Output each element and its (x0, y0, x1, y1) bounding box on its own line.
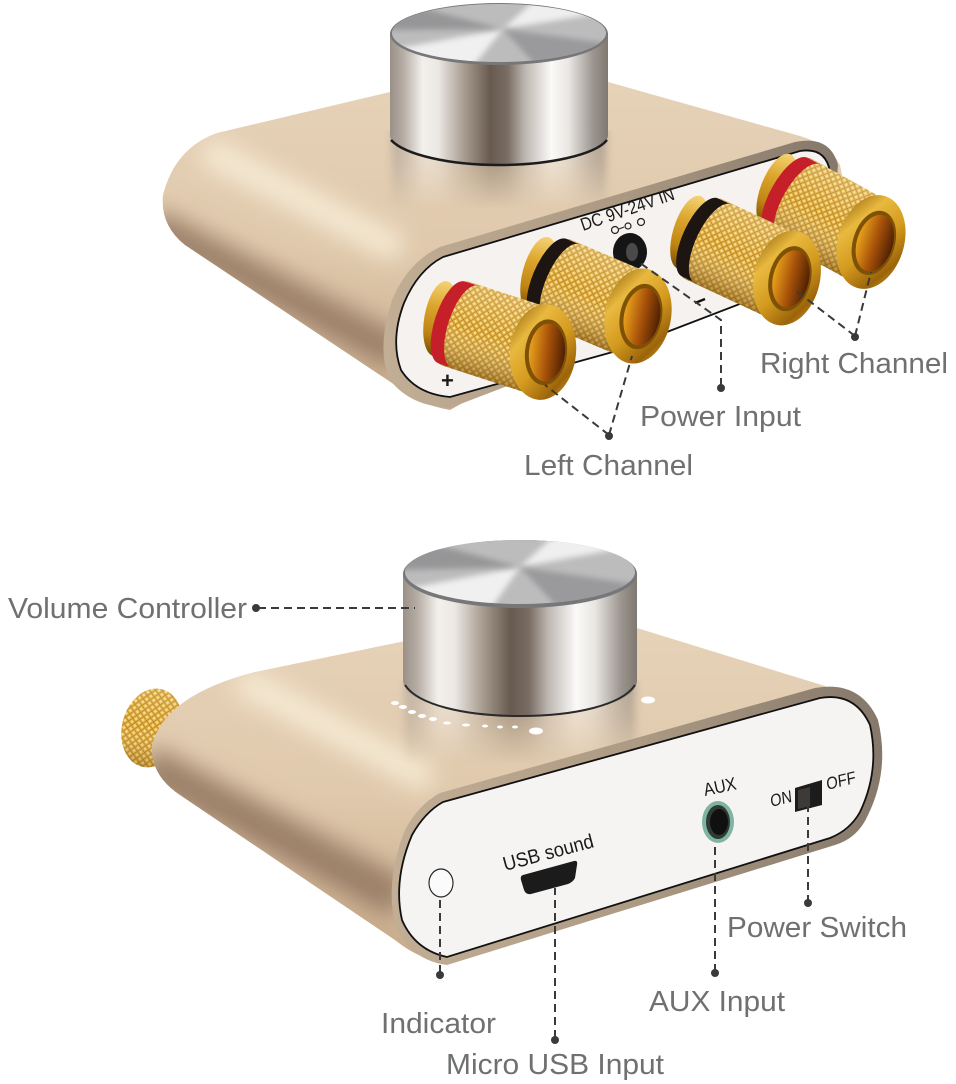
panel text: AUX: AUX (702, 773, 738, 800)
power switch (795, 780, 822, 812)
callout: right channel: Right Channel (760, 348, 948, 380)
amplifier body, rear (150, 82, 845, 430)
minus mark (695, 299, 705, 303)
front panel (396, 150, 830, 397)
right channel terminal, red (732, 132, 934, 310)
callout: power switch: Power Switch (727, 912, 907, 944)
left channel terminal, red (404, 261, 600, 416)
callout: AUX input (649, 842, 785, 1018)
front panel rim (383, 141, 838, 408)
front panel (399, 697, 873, 957)
panel text: USB sound: USB sound (501, 831, 596, 876)
device: top view with speaker terminals (162, 3, 906, 410)
left channel terminal, black (498, 216, 698, 382)
panel text: ON: ON (769, 787, 793, 811)
volume LED dots (391, 696, 655, 734)
power jack (613, 233, 647, 271)
icon: polarity symbol (612, 218, 644, 234)
callout: indicator: Indicator (381, 1008, 496, 1040)
AUX jack (702, 801, 734, 843)
callout: volume controller: Volume Controller (8, 593, 247, 625)
knob reflection on body (392, 130, 606, 210)
callout: power switch (727, 806, 907, 944)
right channel terminal, black (647, 175, 848, 345)
plus mark: + (441, 368, 454, 393)
callout: left channel: Left Channel (524, 450, 693, 482)
callout: indicator (381, 895, 496, 1040)
callout: power input (640, 263, 801, 433)
callout: micro USB input (446, 888, 664, 1081)
indicator light (429, 869, 453, 897)
callout: AUX input: AUX Input (649, 986, 785, 1018)
volume knob, bottom view (400, 530, 640, 716)
volume knob, top view (390, 0, 620, 166)
rear terminal (113, 682, 191, 774)
callout: micro USB input: Micro USB Input (446, 1049, 664, 1081)
panel text: OFF: OFF (825, 768, 857, 794)
knob reflection on body (405, 680, 635, 765)
callout: volume controller (8, 593, 415, 625)
device: bottom view with input ports (113, 530, 882, 980)
micro USB port (521, 861, 577, 894)
panel text: DC input: DC 9V-24V IN (578, 184, 677, 235)
amplifier body, front (152, 628, 827, 956)
callout: power input: Power Input (640, 401, 801, 433)
callout: left channel (524, 356, 693, 482)
front panel rim (392, 687, 882, 965)
callout: right channel (760, 272, 948, 380)
